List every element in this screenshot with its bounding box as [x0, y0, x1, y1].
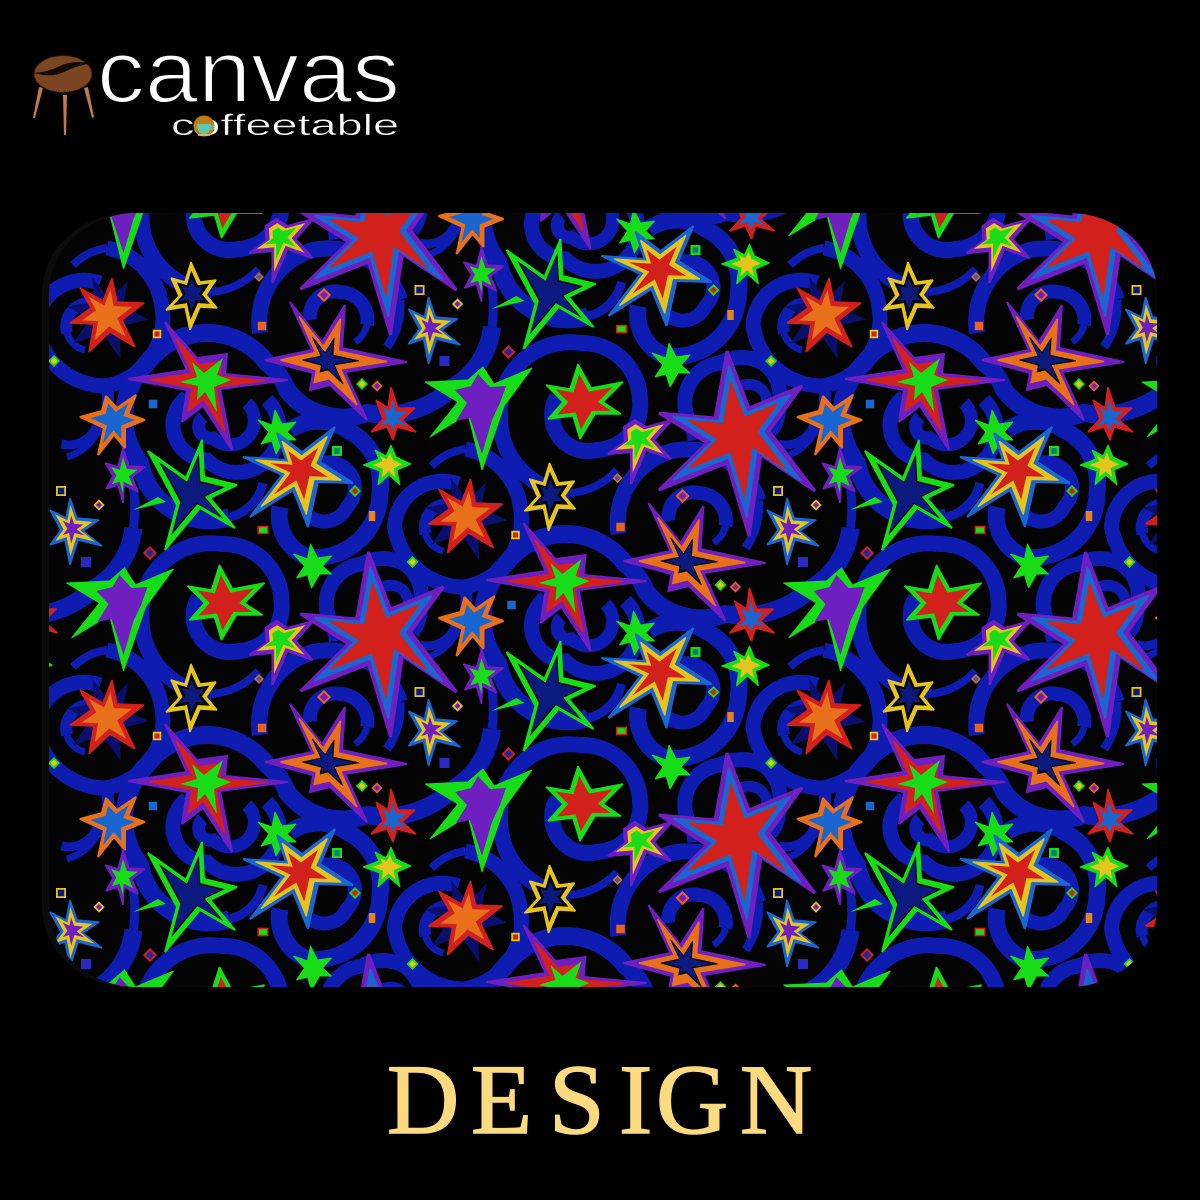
pattern: multicolour stars	[49, 213, 1157, 987]
wordmark: coffeetable: coffeetable	[171, 109, 399, 142]
panel: star pattern mat	[42, 213, 1157, 987]
logo: canvas coffeetable	[33, 22, 400, 142]
pattern: blue swirls	[49, 213, 1157, 987]
title: DESIGN	[387, 1044, 812, 1155]
wordmark: canvas: canvas	[97, 22, 400, 121]
icon: coffee cup	[194, 116, 214, 136]
icon: coffee bean table	[33, 56, 94, 135]
